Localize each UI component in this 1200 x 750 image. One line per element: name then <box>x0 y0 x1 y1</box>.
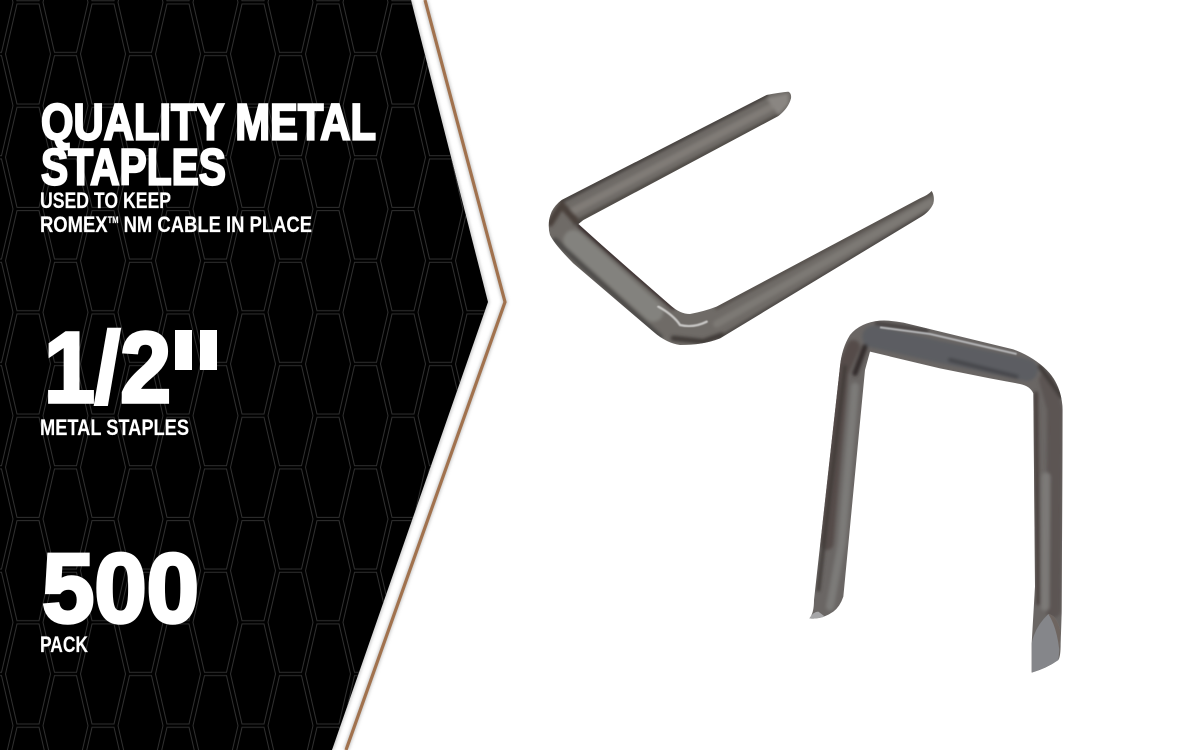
subheading: used to keep romex cable in place: ROMEX <box>40 212 121 237</box>
subheading: used to keep romex cable in place: TM <box>108 215 118 225</box>
image: lower metal staple <box>810 320 1063 672</box>
quantity stat: 500: 500 <box>42 533 199 643</box>
panel: black hexagon-pattern chevron <box>0 0 500 750</box>
heading: quality metal staples: STAPLES <box>41 138 226 196</box>
subheading: used to keep romex cable in place: NM CABLE IN PLACE <box>118 212 312 237</box>
image: upper metal staple <box>548 92 934 345</box>
chevron accent line <box>346 0 505 750</box>
heading: quality metal staples <box>41 94 376 196</box>
heading: quality metal staples: QUALITY METAL <box>41 94 376 150</box>
subheading: used to keep romex cable in place <box>40 188 312 237</box>
size stat: 1/2 inch: 1/2 <box>44 312 171 424</box>
subheading: used to keep romex cable in place: USED TO KEEP <box>40 188 171 213</box>
size label: METAL STAPLES <box>40 415 189 440</box>
quantity label: PACK <box>40 632 88 657</box>
